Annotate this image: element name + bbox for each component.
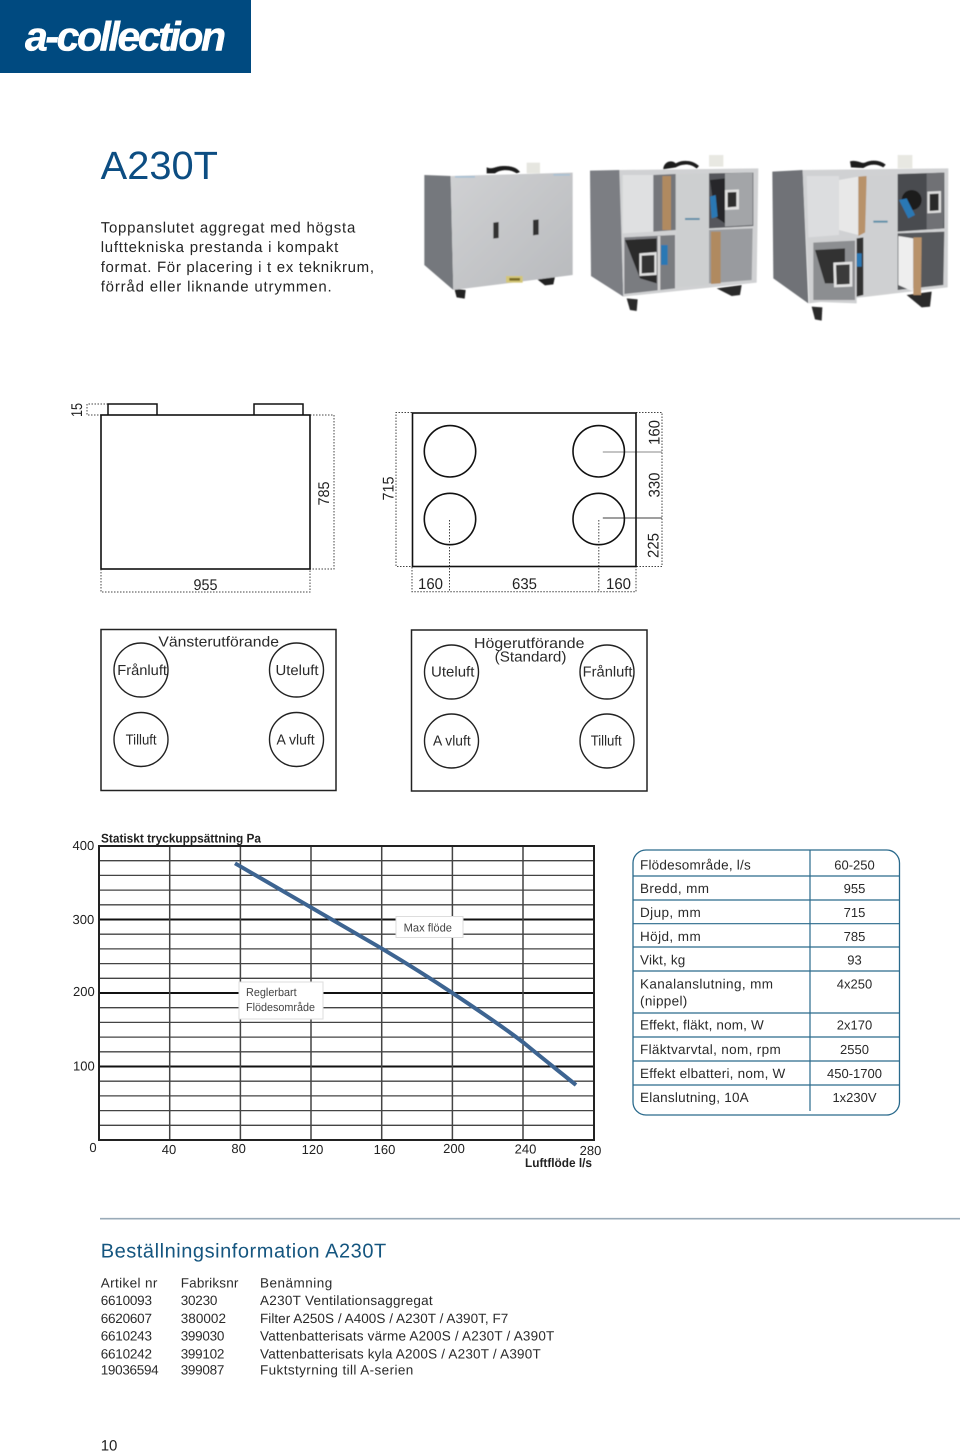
row values: 2550 <box>840 1042 869 1057</box>
callout: Reglerbart flödesområde: Reglerbart <box>246 987 297 999</box>
row labels: Djup, mm <box>640 905 701 920</box>
column: article number: 6610242 <box>101 1346 152 1361</box>
photo: unit with open front <box>590 155 758 311</box>
callout: Reglerbart flödesområde <box>239 982 323 1019</box>
column: article number: 6620607 <box>101 1311 152 1326</box>
y axis labels: 200 <box>73 984 95 999</box>
x axis labels <box>89 1140 601 1158</box>
row values: 955 <box>844 881 865 896</box>
row labels: Höjd, mm <box>640 929 701 944</box>
column: description: Benämning <box>260 1276 332 1291</box>
photo: unit with pulled-out parts <box>772 155 948 321</box>
column: description: A230T Ventilationsaggregat <box>260 1293 433 1308</box>
row labels: Effekt elbatteri, nom, W <box>640 1066 786 1081</box>
row values: 60-250 <box>834 858 875 872</box>
row labels: Flödesområde, l/s <box>640 858 751 872</box>
dimension labels <box>380 420 664 593</box>
intro text: Toppanslutet aggregat med högsta <box>101 220 356 236</box>
dimension labels: 785 <box>316 482 333 506</box>
x axis labels: 80 <box>231 1141 246 1156</box>
chart title: Statiskt tryckuppsättning Pa <box>101 832 262 846</box>
row labels: Bredd, mm <box>640 881 709 896</box>
title: A230T <box>101 144 218 188</box>
dimension labels: 225 <box>646 533 662 558</box>
y axis labels: 300 <box>72 912 94 927</box>
chart: static pressure vs airflow <box>72 832 601 1170</box>
dimension labels: 635 <box>512 576 537 593</box>
intro text: format. För placering i t ex teknikrum, <box>101 259 374 276</box>
row labels: Elanslutning, 10A <box>640 1090 749 1105</box>
x axis labels: 0 <box>89 1140 97 1155</box>
dimension labels: 160 <box>606 576 631 593</box>
dimension labels <box>69 403 333 594</box>
column: factory number: 399102 <box>181 1346 224 1361</box>
port labels: A vluft <box>276 732 315 748</box>
row values <box>827 858 882 1105</box>
row values: 1x230V <box>832 1090 877 1105</box>
row labels: Kanalanslutning, mm <box>640 976 773 992</box>
y axis labels <box>72 838 95 1074</box>
x axis labels: 200 <box>443 1141 465 1156</box>
row values: 2x170 <box>837 1018 872 1032</box>
column: factory number: 399087 <box>181 1362 224 1378</box>
photo: closed unit <box>424 163 573 299</box>
column: article number <box>101 1276 159 1378</box>
row values: 715 <box>844 905 865 920</box>
port labels: Frånluft <box>117 663 167 679</box>
port labels: Tilluft <box>591 734 622 750</box>
y axis labels: 100 <box>73 1058 95 1074</box>
dimension labels: 15 <box>69 403 86 417</box>
dimension labels: 160 <box>418 576 443 593</box>
intro text <box>101 220 374 296</box>
specification table <box>633 850 900 1115</box>
max flow curve <box>235 863 576 1085</box>
column: factory number: 30230 <box>181 1293 217 1308</box>
port labels: Uteluft <box>431 665 474 681</box>
column: description: Fuktstyrning till A-serien <box>260 1362 413 1378</box>
product photos <box>424 155 948 321</box>
column: article number: Artikel nr <box>101 1276 158 1291</box>
intro text: lufttekniska prestanda i kompakt <box>101 239 339 256</box>
row values: 4x250 <box>837 976 872 992</box>
column: factory number: Fabriksnr <box>181 1276 239 1291</box>
heading: Högerutförande: Högerutförande <box>474 636 584 652</box>
ordering table <box>101 1276 554 1378</box>
x axis title: Luftflöde l/s <box>525 1156 592 1170</box>
column: factory number <box>181 1276 239 1378</box>
callout: Reglerbart flödesområde: Flödesområde <box>246 1001 315 1014</box>
column: description: Filter A250S / A400S / A230T / A390T, F7 <box>260 1311 508 1326</box>
column: description: Vattenbatterisats värme A200S / A230T / A390T <box>260 1329 554 1344</box>
dimension labels: 715 <box>380 476 398 500</box>
column: description <box>260 1276 554 1378</box>
heading: Högerutförande: (Standard) <box>495 650 566 666</box>
heading: Högerutförande <box>474 636 584 666</box>
port labels <box>431 665 632 750</box>
callout: Max flöde <box>396 916 463 938</box>
dimension labels: 330 <box>646 472 664 498</box>
callout: Max flöde: Max flöde <box>404 922 452 934</box>
logo banner <box>0 0 251 73</box>
heading: Vänsterutförande: Vänsterutförande <box>158 635 279 651</box>
port labels: Uteluft <box>276 663 318 679</box>
row labels <box>640 858 786 1105</box>
logo banner: a-collection <box>25 14 226 60</box>
dimension drawing: front view <box>380 412 664 593</box>
column: article number: 6610093 <box>101 1293 152 1308</box>
row labels: Vikt, kg <box>640 952 685 968</box>
dimension labels: 955 <box>194 577 218 594</box>
panel: right-hand version <box>412 630 647 791</box>
row values: 450-1700 <box>827 1066 882 1081</box>
unit outline with nozzles <box>101 404 310 569</box>
row labels: (nippel) <box>640 994 687 1009</box>
port labels <box>117 663 318 748</box>
column: article number: 6610243 <box>101 1329 152 1344</box>
column: factory number: 399030 <box>181 1329 224 1344</box>
column: factory number: 380002 <box>181 1311 226 1326</box>
column: description: Vattenbatterisats kyla A200S / A230T / A390T <box>260 1346 541 1361</box>
column: article number: 19036594 <box>101 1362 159 1378</box>
x axis labels: 240 <box>515 1142 536 1156</box>
row labels: Fläktvarvtal, nom, rpm <box>640 1042 781 1057</box>
x axis labels: 40 <box>162 1142 176 1157</box>
unit outline with four openings <box>412 413 636 566</box>
port labels: Frånluft <box>583 665 632 681</box>
row values: 785 <box>844 929 865 944</box>
heading: ordering information: Beställningsinformation A230T <box>101 1241 386 1263</box>
y axis labels: 400 <box>72 838 94 853</box>
port labels: A vluft <box>433 734 471 750</box>
row labels: Effekt, fläkt, nom, W <box>640 1018 764 1032</box>
port labels: Tilluft <box>126 732 157 748</box>
x axis labels: 160 <box>374 1142 395 1157</box>
x axis labels: 120 <box>302 1142 323 1157</box>
panel: left-hand version <box>101 630 336 790</box>
dimension labels: 160 <box>646 420 664 445</box>
row values: 93 <box>847 952 862 968</box>
x axis labels: 280 <box>580 1143 601 1158</box>
intro text: förråd eller liknande utrymmen. <box>101 278 332 296</box>
dimension drawing: side view <box>69 403 334 594</box>
